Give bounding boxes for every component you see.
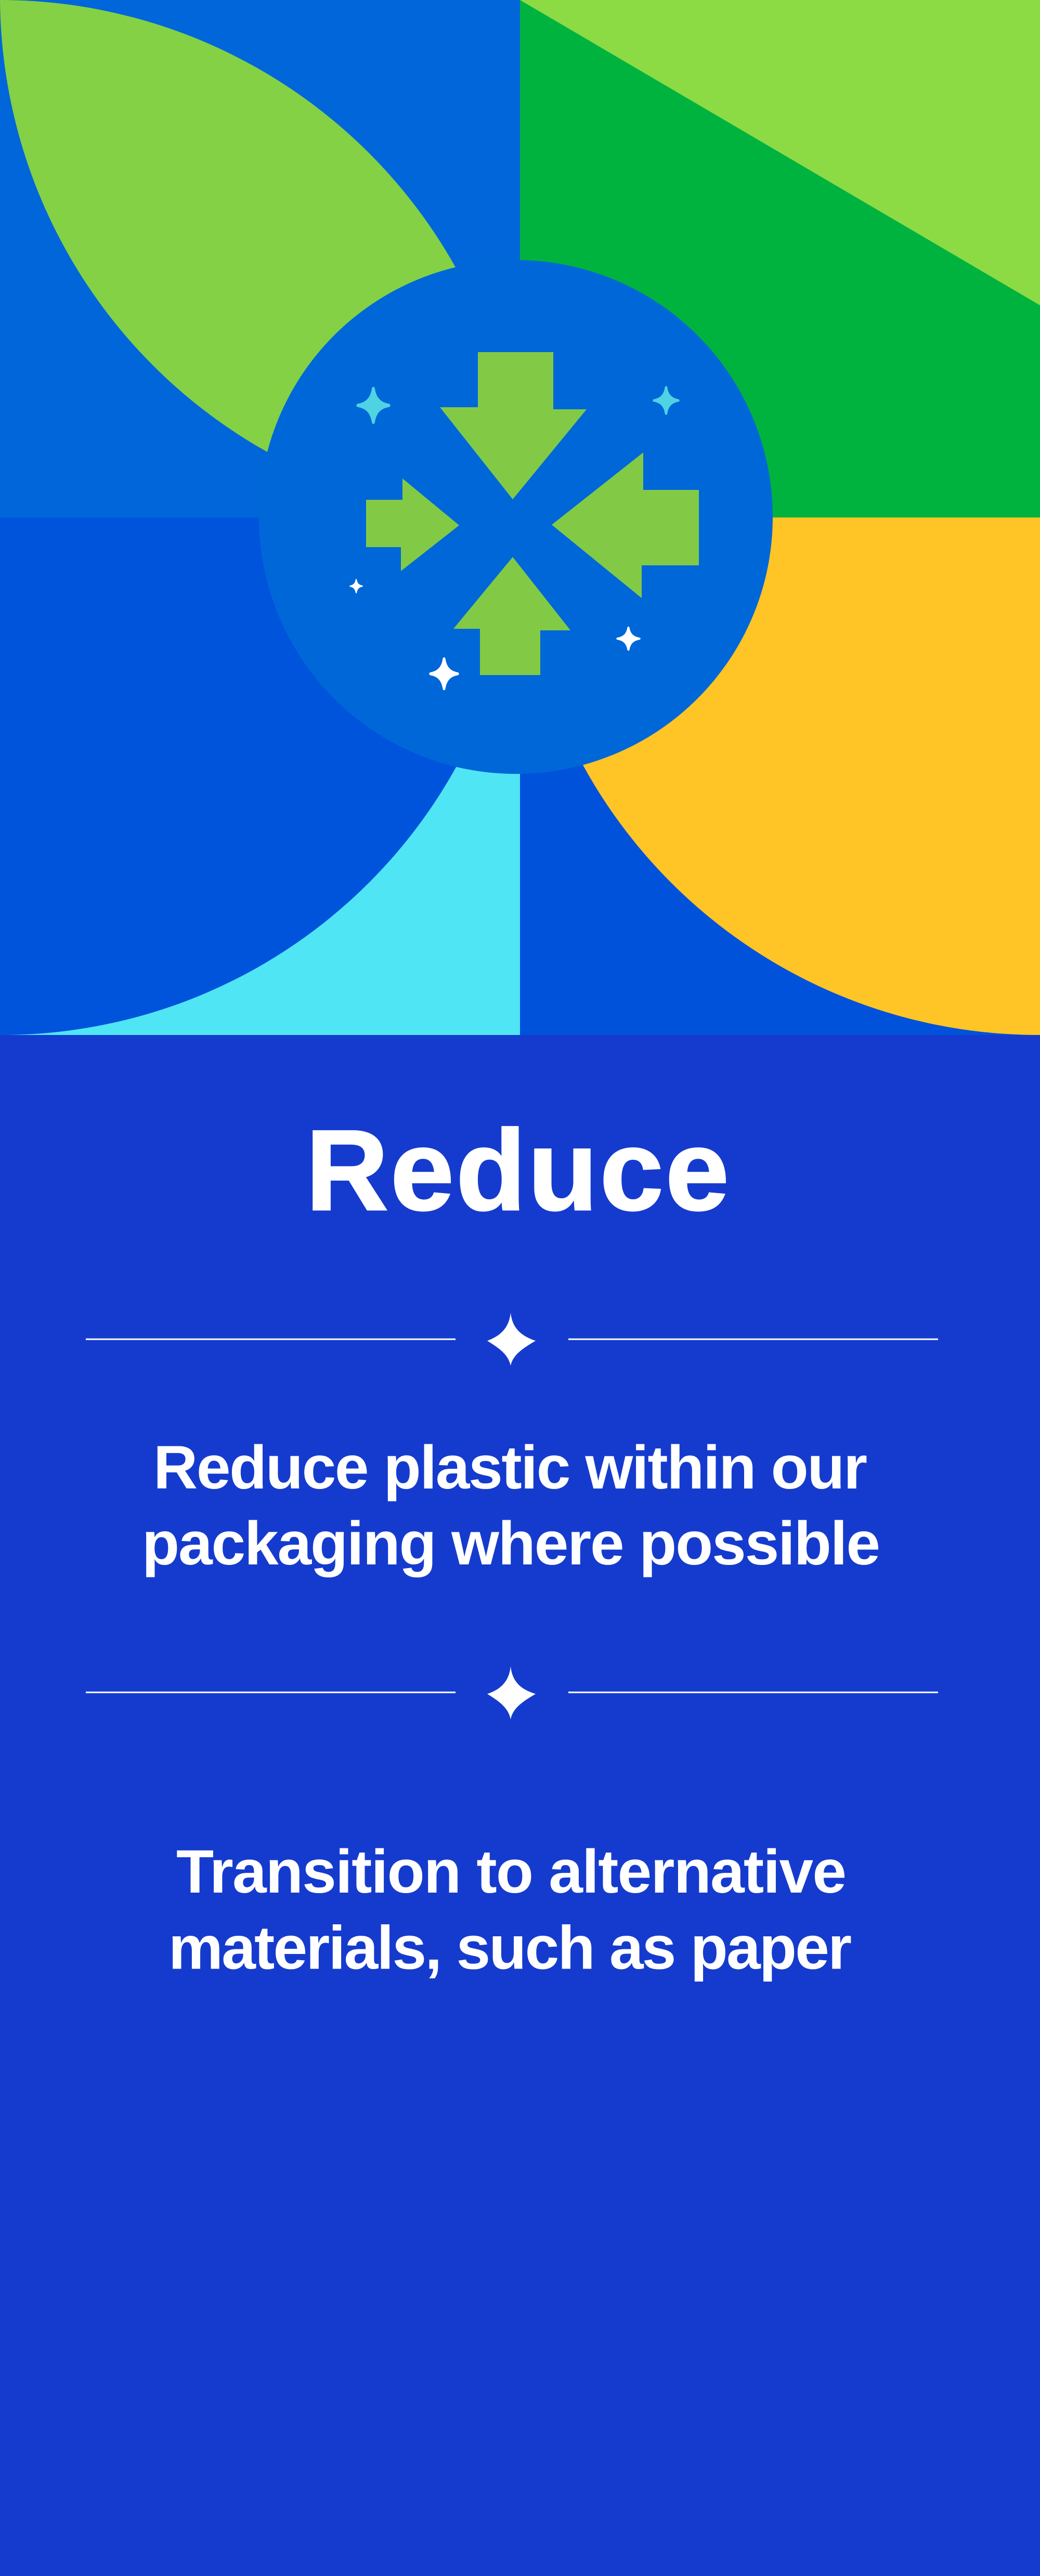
icon: arrow pointing up: [453, 557, 570, 675]
hero illustration: [0, 0, 1040, 1035]
icon: arrow pointing left: [552, 452, 699, 598]
petal: bottom-left cyan: [0, 728, 520, 1035]
divider 1: [86, 1313, 938, 1366]
text block: alternative materials: [168, 1837, 852, 1983]
centre circle: [259, 260, 773, 774]
panel: top-right quadrant: [520, 0, 1040, 518]
panel: bottom-right quadrant: [520, 517, 1040, 1035]
text block: alternative materials: materials, such as paper: [168, 1914, 852, 1983]
icon: small white sparkle: [349, 579, 363, 593]
icon: arrow pointing down: [440, 352, 587, 499]
triangle: top-right light green: [520, 0, 1040, 305]
text block: reduce plastic: packaging where possible: [142, 1509, 880, 1578]
icon: arrow pointing right: [366, 478, 459, 571]
icon: medium white sparkle: [616, 627, 641, 651]
leaf shape: top-left green: [0, 0, 456, 452]
panel: bottom-left quadrant: [0, 517, 520, 1035]
icon: large white sparkle: [429, 657, 459, 690]
title: Reduce: [306, 1106, 729, 1234]
text block: reduce plastic: [142, 1433, 880, 1578]
text block: alternative materials: Transition to alternative: [176, 1837, 847, 1906]
icon: cyan sparkle right: [653, 386, 680, 415]
panel: top-left quadrant: [0, 0, 520, 518]
text block: reduce plastic: Reduce plastic within our: [153, 1433, 867, 1502]
icon: cyan sparkle left: [356, 387, 391, 424]
petal: bottom-right yellow: [583, 517, 1040, 1035]
divider 2: [86, 1666, 938, 1719]
